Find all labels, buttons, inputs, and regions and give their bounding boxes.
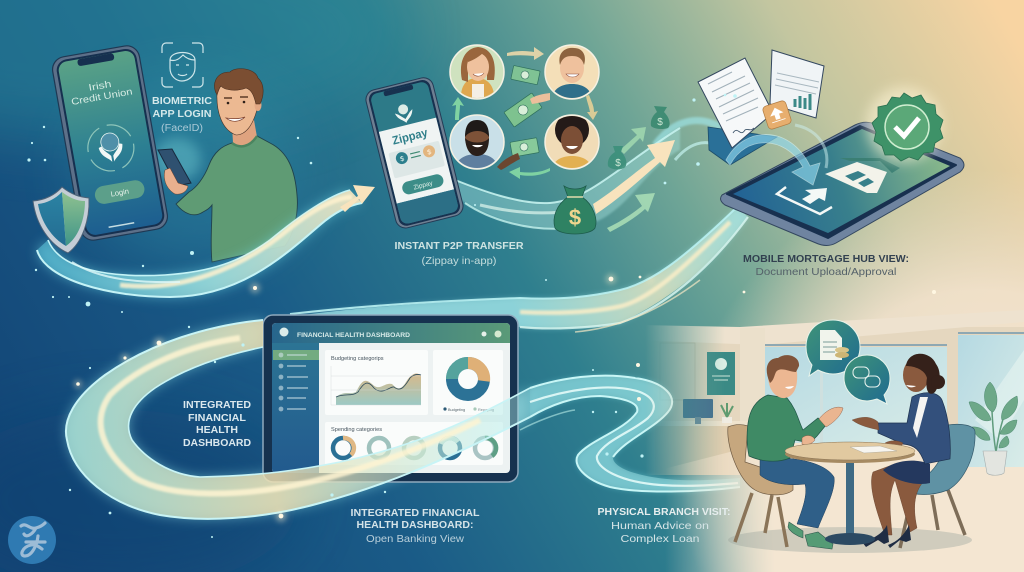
label: mobile mortgage hub: MOBILE MORTGAGE HUB VIEW: [743, 253, 909, 265]
speech bubble: documents [806, 320, 860, 376]
icon: large money bag: $ [569, 205, 581, 230]
label: biometric app login: (FaceID) [161, 123, 203, 134]
header bar: FINANCIAL HEALITH DASHBOARD [297, 332, 410, 339]
panel: peer to peer transfer circle [450, 45, 599, 179]
chair: adviser [900, 424, 975, 548]
card: donut chart [433, 350, 503, 415]
facial features [224, 97, 248, 98]
banknote lower [510, 138, 539, 157]
sidebar [272, 343, 319, 473]
arrow: to right [507, 47, 544, 60]
icon: brand logo [8, 516, 56, 564]
label: open banking view: INTEGRATED FINANCIAL [350, 507, 480, 519]
panel: mortgage tablet and documents [698, 50, 964, 246]
branch interior backdrop [640, 310, 1024, 475]
head [903, 358, 929, 392]
transfer coins: $ [427, 149, 432, 157]
floor shadow [728, 527, 972, 553]
sweater [176, 136, 297, 262]
icon: small money bag [608, 146, 626, 169]
card: spending categories [325, 422, 503, 465]
label: physical branch visit: PHYSICAL BRANCH VISIT: [598, 506, 730, 518]
card: budgeting chart [325, 350, 428, 415]
arrow: documents into tablet [726, 125, 827, 185]
label: mobile mortgage hub: Document Upload/Approval [756, 266, 896, 278]
person: woman with curly hair [545, 113, 599, 172]
person: adviser seated [852, 354, 950, 548]
panel: financial health dashboard [263, 315, 518, 482]
label: biometric app login: APP LOGIN [152, 108, 212, 120]
head [217, 82, 258, 135]
login button: Login [110, 187, 130, 199]
phone subtitle: Credit Union [70, 86, 133, 108]
hands [802, 407, 843, 445]
label: left dashboard title: DASHBOARD [183, 437, 251, 449]
label: open banking view [350, 507, 480, 545]
label: physical branch visit: Complex Loan [620, 533, 700, 545]
tablet body [721, 122, 964, 246]
hand lower [497, 153, 520, 170]
arrow: first ribbon head [340, 185, 375, 212]
jacket [878, 393, 950, 464]
label: mobile mortgage hub [743, 253, 909, 278]
flow ribbon: S-curve swirl into branch visit [520, 376, 740, 492]
icon: security shield [33, 187, 89, 253]
phone screen [57, 50, 164, 236]
arrow: tan growth arrow [593, 140, 675, 214]
trousers [760, 458, 834, 528]
Zippay button [401, 173, 445, 196]
shoes [788, 522, 833, 549]
hair [215, 69, 263, 104]
label: open banking view: Open Banking View [366, 533, 464, 545]
Zippay button: Zippay [413, 180, 434, 192]
document: signed form [698, 58, 773, 148]
label: left dashboard title: HEALTH [196, 424, 238, 436]
label: instant P2P transfer: (Zippay in-app) [422, 255, 496, 267]
label: open banking view: HEALTH DASHBOARD: [356, 519, 474, 531]
table [785, 442, 915, 545]
card: spending categories: Spending categories [331, 427, 382, 433]
plant [969, 382, 1018, 475]
neck [232, 120, 257, 146]
card: budgeting chart: Budgeting categorips [331, 356, 384, 362]
icon: house [825, 158, 900, 193]
Zippay phone [364, 76, 465, 230]
flow ribbon: upper band to mortgage tablet [263, 121, 748, 335]
banknote [511, 65, 540, 85]
card: donut chart: Repaying [478, 408, 494, 412]
person: woman with long hair [450, 45, 504, 100]
person: customer with phone [153, 69, 297, 262]
head [768, 362, 797, 398]
tablet frame [263, 315, 518, 482]
main area [272, 323, 510, 473]
arrow: green growth arrow [607, 193, 655, 232]
label: left dashboard title: INTEGRATED [183, 399, 251, 411]
flow ribbon: first login swirl [37, 190, 362, 297]
folder [708, 127, 777, 165]
transfer coins [395, 144, 436, 165]
card: donut chart: Budgeting [448, 408, 465, 412]
person: customer seated [747, 355, 843, 549]
heels [862, 525, 911, 548]
label: instant P2P transfer [394, 240, 524, 267]
phone title: Irish [88, 79, 112, 94]
icon: large money bag [554, 186, 596, 234]
label: left dashboard title [183, 399, 251, 449]
banknote handed over [504, 93, 542, 127]
sweater [747, 395, 826, 461]
legs [871, 465, 925, 535]
header bar [272, 323, 510, 343]
label: instant P2P transfer: INSTANT P2P TRANSFER [394, 240, 524, 252]
arrow: up [452, 97, 464, 120]
label: left dashboard title: FINANCIAL [188, 412, 247, 424]
label: physical branch visit: Human Advice on [611, 520, 709, 532]
label: biometric app login [152, 95, 212, 134]
credit union logo [84, 121, 138, 175]
icon: approval badge [866, 87, 943, 163]
tablet screen [733, 129, 950, 233]
login button [93, 179, 146, 205]
icon: upload badge [762, 100, 792, 130]
icon: far money bag [651, 106, 670, 129]
panel: physical branch scene [640, 310, 1024, 572]
icon: face ID scan [162, 43, 203, 87]
icon: small money bag: $ [615, 158, 621, 169]
small phone and hand [158, 149, 191, 186]
arrow: left [509, 167, 550, 179]
speech bubble: conversation [844, 355, 890, 404]
person: smiling man [545, 45, 599, 100]
label: physical branch visit [598, 506, 730, 545]
icon: upload tray [777, 187, 832, 214]
floor [640, 443, 1024, 572]
arrow: small green arrow [620, 127, 646, 154]
skirt [883, 461, 930, 484]
flow ribbon: loop sweeping across dashboard [66, 320, 530, 519]
sparkle particles [27, 94, 936, 538]
Zippay screen [370, 81, 459, 225]
person: bearded man [450, 115, 504, 170]
hands [852, 417, 903, 449]
arrow: down [586, 95, 598, 120]
chair: customer [728, 425, 793, 547]
hand holding note [530, 93, 550, 104]
biometric phone [51, 44, 169, 242]
flow ribbon: middle band with arrows [455, 128, 680, 229]
label: biometric app login: BIOMETRIC [152, 95, 212, 107]
windows [765, 347, 947, 443]
Zippay wordmark: Zippay [391, 125, 429, 148]
icon: upload arrow [802, 188, 827, 204]
flow ribbon: lower loop around dashboard title [66, 320, 530, 519]
icon: far money bag: $ [657, 117, 663, 128]
transfer coins: $ [399, 156, 405, 163]
document: chart report [770, 50, 824, 118]
